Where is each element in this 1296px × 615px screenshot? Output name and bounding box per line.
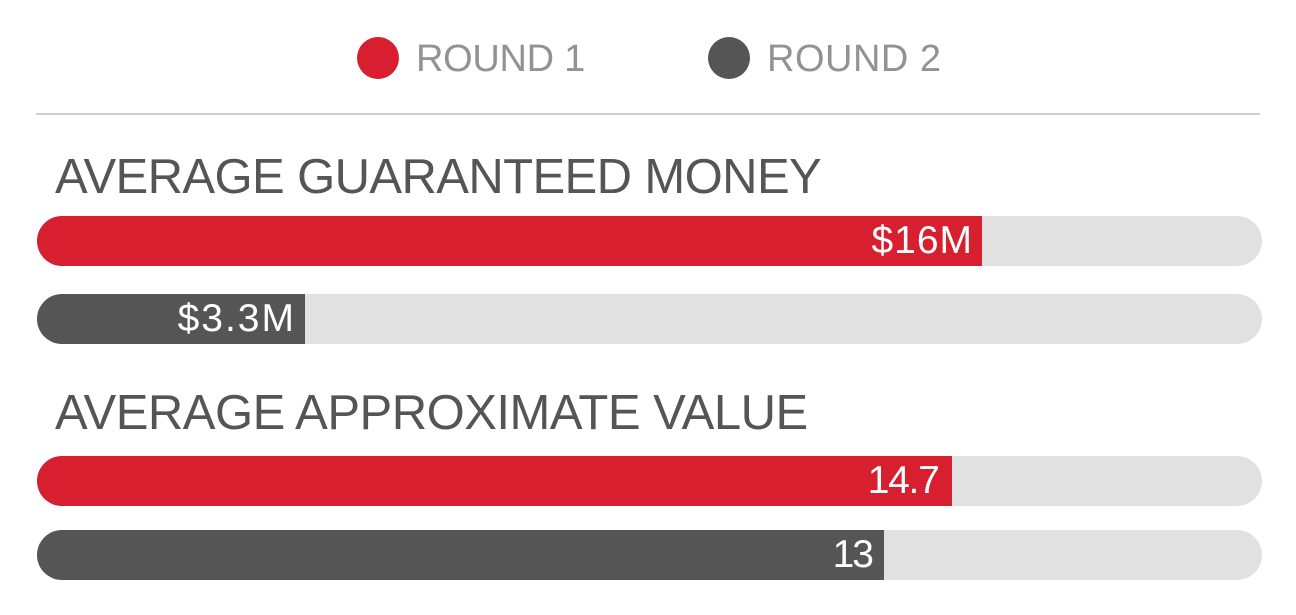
heading: average approximate value: AVERAGE APPROXIMATE VALUE (55, 386, 808, 440)
bar: approximate value round 2 (37, 530, 1262, 580)
heading: average guaranteed money: AVERAGE GUARANTEED MONEY (55, 150, 821, 204)
bar: guaranteed money round 2 (37, 294, 1262, 344)
legend: round 2 swatch (708, 37, 750, 79)
bar: guaranteed money round 2: $3.3M (178, 297, 296, 340)
bar: guaranteed money round 1: $16M (871, 219, 973, 262)
bar: approximate value round 1 (37, 456, 1262, 506)
legend (357, 37, 942, 80)
bar: guaranteed money round 1 (37, 216, 1262, 266)
legend: round 1 label: ROUND 1 (416, 38, 585, 80)
bar: approximate value round 2: 13 (833, 533, 872, 576)
legend: round 1 swatch (357, 37, 399, 79)
legend: round 2 label: ROUND 2 (767, 38, 942, 80)
bar: approximate value round 1: 14.7 (868, 459, 938, 502)
